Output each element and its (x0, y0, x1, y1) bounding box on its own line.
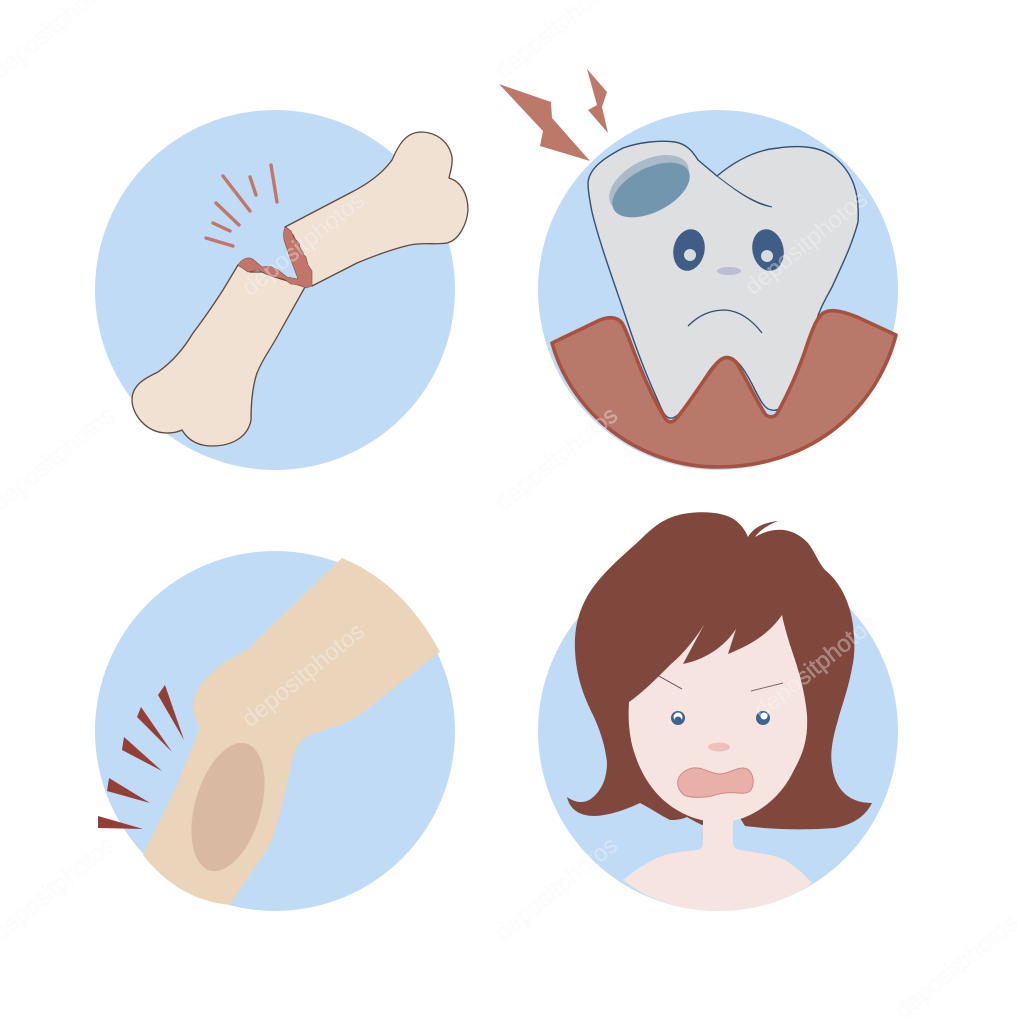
panel: woman in pain (538, 512, 898, 911)
left eyebrow (657, 675, 682, 689)
icon: pain spikes (98, 685, 184, 829)
tooth body (588, 141, 858, 418)
cavity (600, 143, 698, 229)
icon: pain lines (206, 165, 277, 246)
icon: face (629, 615, 807, 822)
background circle: bone (95, 110, 455, 470)
watermark text: depositphotos (237, 618, 370, 733)
right eyebrow (751, 683, 783, 691)
icon: tooth (588, 141, 858, 418)
panel: knee pain (95, 551, 455, 911)
tooth mouth (688, 310, 762, 333)
panel: toothache (499, 69, 898, 470)
watermark text: depositphotos (749, 610, 882, 725)
icon: leg and knee (143, 558, 440, 905)
watermark text: depositphotos (490, 832, 623, 947)
watermark text: depositphotos (490, 402, 623, 517)
panel: broken bone (95, 110, 468, 470)
left eye (669, 226, 709, 274)
tooth crease (717, 176, 772, 207)
watermark text: depositphotos (890, 910, 1023, 1024)
icon: lightning bolts (499, 69, 608, 161)
background circle: tooth (538, 110, 898, 470)
icon: fracture edge (238, 227, 312, 288)
right eye (756, 711, 770, 725)
right eye (748, 226, 788, 274)
nose (708, 742, 730, 752)
left eye (671, 711, 685, 725)
icon: lower bone fragment (132, 265, 305, 446)
background circle: woman (538, 551, 898, 911)
icon: upper bone fragment (285, 132, 468, 286)
watermark text: depositphotos (237, 187, 370, 302)
background circle: knee (95, 551, 455, 911)
watermark text: depositphotos (740, 186, 873, 301)
tooth nose (717, 267, 741, 275)
icon: hair (567, 512, 872, 829)
icon: gums (552, 311, 896, 467)
mouth (678, 768, 753, 797)
icon: neck and shoulders (623, 810, 812, 911)
icon: bruise (178, 734, 278, 880)
